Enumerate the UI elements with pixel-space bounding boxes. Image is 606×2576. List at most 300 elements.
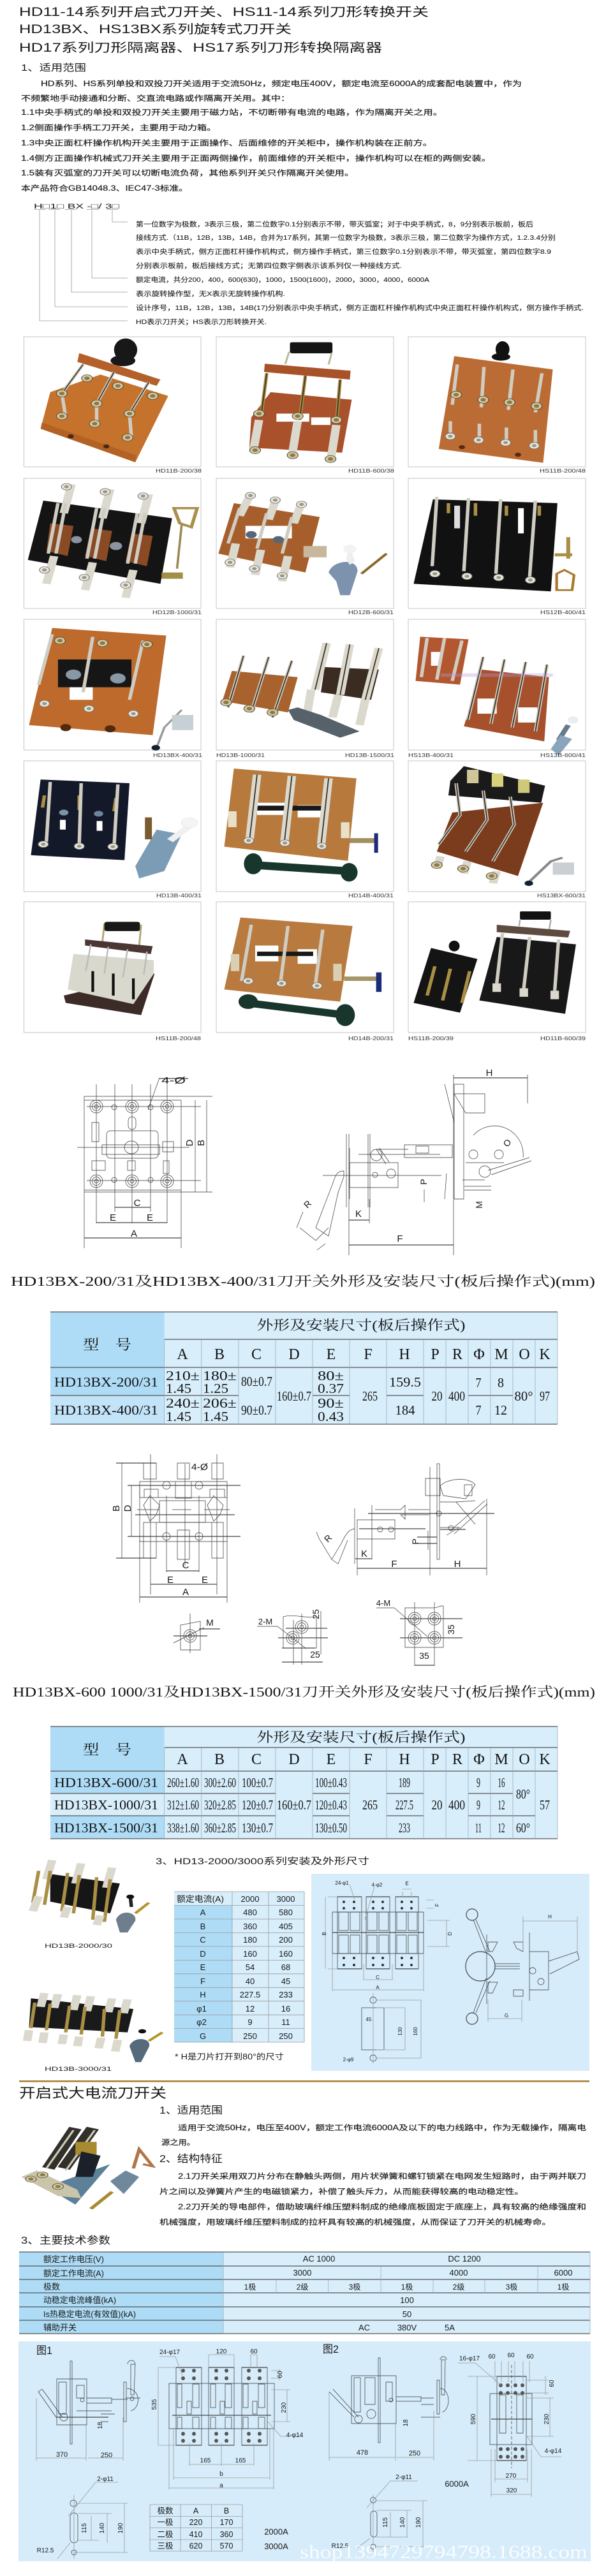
drawing: HD13BX-200/400 front view: A <box>131 1228 137 1239</box>
drawing: 2-M terminal: 25 <box>311 1609 321 1619</box>
drawing: HD13BX-600/1000/1500 side view: F <box>391 1559 397 1570</box>
table: HD13BX-200/400 dimensions: 97 <box>540 1388 550 1404</box>
table: HD13BX-200/400 dimensions: 159.5 <box>389 1374 421 1390</box>
title: HD17系列刀形隔离器、HS17系列刀形转换隔离器 <box>19 41 382 55</box>
table: HD13BX-200/400 dimensions: 90±0.7 <box>241 1402 272 1418</box>
model code diagram: 表示旋转操作型，无X表示无旋转操作机构. <box>136 290 285 298</box>
drawing: HD13 2000/3000 mounting slot: 130 <box>397 2027 403 2036</box>
table: HD13BX-600/1000/1500 dimensions <box>50 1726 558 1839</box>
photo: HS13BX-600/31 <box>431 766 574 886</box>
drawing: HD13BX-200/400 side view <box>297 1068 531 1255</box>
panel: HD13 2000/3000 drawing background <box>311 1874 589 2071</box>
title <box>19 5 429 55</box>
table: HD13BX-200/400 dimensions: C <box>251 1346 262 1363</box>
photo: HD12B-600/31 <box>218 492 387 595</box>
figure 1: rating labels <box>264 2527 288 2551</box>
figure 2: 6000A plan view: 60 <box>488 2353 496 2360</box>
figure 2: 6000A plan view: 270 <box>506 2473 517 2480</box>
figure 1: plan view: 165 <box>235 2457 246 2464</box>
table: HD13BX-200/400 dimensions: 80± <box>318 1368 344 1383</box>
table: HD13BX-600/1000/1500 dimensions: 型 号 <box>83 1742 131 1758</box>
figure 2: 6000A plan view: 60 <box>507 2352 515 2359</box>
photo captions: HD11B-600/39 <box>540 1035 586 1041</box>
table: main technical parameters: DC 1200 <box>448 2254 481 2263</box>
photo: HD13B-400/31 <box>31 779 198 878</box>
table: main technical parameters: AC <box>358 2323 370 2332</box>
drawing: 4-M terminal <box>376 1598 462 1666</box>
table: HD13BX-600/1000/1500 dimensions: R <box>452 1751 462 1768</box>
table: HD13 2000/3000 dimensions: B <box>200 1922 205 1931</box>
text block: scope description: 本产品符合GB14048.3、IEC47-3标准。 <box>21 184 188 193</box>
table: HD13 2000/3000 dimensions: 12 <box>246 2004 255 2013</box>
table: HD13BX-200/400 dimensions: 1.25 <box>203 1381 228 1396</box>
table: HD13BX-600/1000/1500 dimensions: 400 <box>448 1797 465 1813</box>
figure 1: plan view: 24-φ17 <box>159 2349 180 2356</box>
table: HD13 2000/3000 dimensions: 250 <box>243 2031 257 2041</box>
drawing: HD13BX-200/400 front view: C <box>134 1198 141 1209</box>
figure 2: mounting slot: 115 <box>382 2517 389 2528</box>
text block: scope description: 1.5装有灭弧室的刀开关可以切断电流负荷，其他系列开关只作隔离开关使用。 <box>21 168 354 177</box>
table: HD13 2000/3000 dimensions: G <box>200 2031 206 2041</box>
drawing: HD13BX-200/400 side view: M <box>474 1201 484 1209</box>
photo: high current knife switch <box>21 2128 152 2209</box>
model code diagram <box>34 203 584 326</box>
table: HD13BX-200/400 dimensions: 210± <box>166 1368 200 1383</box>
drawing: HD13 2000/3000 plan view: B <box>321 1932 327 1936</box>
drawing: 4-M terminal: 35 <box>419 1651 429 1661</box>
drawing: HD13 2000/3000 plan view: A <box>376 1985 380 1991</box>
table: HD13 2000/3000 dimensions: 额定电流(A) <box>177 1894 224 1904</box>
table: HD13BX-600/1000/1500 dimensions: 12 <box>498 1797 505 1813</box>
table: HD13 2000/3000 dimensions: F <box>200 1976 205 1986</box>
drawing: HD13BX-200/400 side view: F <box>397 1233 403 1244</box>
figure 1: plan view <box>151 2348 304 2489</box>
figure 1: mounting slot <box>37 2476 128 2559</box>
table: HD13BX-200/400 dimensions: R <box>452 1346 462 1363</box>
table: HD13BX-600/1000/1500 dimensions: 120±0.43 <box>315 1797 347 1813</box>
figure 1: plan view: 165 <box>200 2457 211 2464</box>
section: scope and structure: 1、适用范围 <box>159 2105 223 2116</box>
drawing: HD13 2000/3000 plan view: C <box>376 1975 380 1980</box>
drawing: HD13BX-600/1000/1500 front view: E <box>167 1575 174 1586</box>
table: HD13 2000/3000 dimensions: 233 <box>279 1990 293 1999</box>
table: HD13BX-600/1000/1500 dimensions: 320±2.85 <box>204 1797 236 1813</box>
model code diagram: 第一位数字为极数，3表示三极，第二位数字0.1分别表示不带，带灭弧室；对于中央手柄式，8，9分别表示板前，板后 <box>136 220 533 228</box>
table: HD13BX-600/1000/1500 dimensions: 360±2.85 <box>204 1820 236 1836</box>
figure 1: poles table: 三极 <box>157 2542 174 2550</box>
table: HD13BX-200/400 dimensions: 7 <box>476 1375 481 1390</box>
table: HD13 2000/3000 dimensions: H <box>200 1990 206 1999</box>
drawing: single M terminal: M <box>206 1617 214 1628</box>
drawing: HD13BX-600/1000/1500 side view: K <box>361 1549 367 1559</box>
photo: HS11B-200/39 and HD11B-600/39 <box>413 911 576 1014</box>
drawing: HD13BX-200/400 side view: K <box>355 1209 362 1219</box>
photo captions: HD11B-200/38 <box>156 467 202 474</box>
figure 2: side view <box>329 2357 448 2461</box>
text block: scope description <box>21 79 522 193</box>
table: HD13BX-600/1000/1500 dimensions: O <box>519 1751 530 1768</box>
table: HD13 2000/3000 dimensions: 360 <box>243 1922 257 1931</box>
figure 2: 6000A plan view: 590 <box>470 2413 477 2424</box>
figure 1: mounting slot: 115 <box>81 2523 88 2533</box>
figure 2: mounting slot <box>332 2474 427 2553</box>
table: HD13BX-600/1000/1500 dimensions: E <box>327 1751 336 1768</box>
figure 1: plan view: 4-φ14 <box>286 2432 304 2439</box>
table: HD13 2000/3000 dimensions <box>174 1892 304 2042</box>
drawing: HD13BX-200/400 side view: O <box>501 1137 514 1149</box>
photo: HS11B-200/48 <box>439 341 553 463</box>
table: HD13BX-200/400 dimensions: HD13BX-200/31 <box>54 1374 158 1390</box>
title: HD13BX、HS13BX系列旋转式刀开关 <box>19 22 292 36</box>
table: HD13 2000/3000 dimensions: 16 <box>281 2004 290 2013</box>
table: HD13BX-600/1000/1500 dimensions: 260±1.60 <box>167 1775 199 1790</box>
photo: HD14B-200/31 <box>224 918 381 1026</box>
drawing: HD13BX-600/1000/1500 front view: 4-Ø <box>191 1462 208 1473</box>
table: main technical parameters: 2级 <box>453 2283 464 2292</box>
table: HD13 2000/3000 dimensions: E <box>200 1962 206 1972</box>
table: HD13BX-200/400 dimensions: D <box>288 1346 300 1363</box>
text block: scope description: 1.3中央正面杠杆操作机构开关主要用于正面操作、后面维修的开关柜中，操作机构装在正前方。 <box>21 138 432 147</box>
photo: HD13B-1000/31 and HD13B-1500/31 <box>221 643 379 738</box>
table: HD13BX-600/1000/1500 dimensions: B <box>214 1751 225 1768</box>
table: HD13BX-200/400 dimensions: 8 <box>498 1375 504 1390</box>
table: HD13 2000/3000 dimensions: 250 <box>279 2031 293 2041</box>
table: HD13 2000/3000 dimensions: 160 <box>279 1949 293 1959</box>
drawing: HD13 2000/3000 mounting slot: 160 <box>413 2027 418 2036</box>
text block: scope description: 1.2侧面操作手柄工刀开关，主要用于动力箱。 <box>21 123 216 132</box>
table: HD13BX-200/400 dimensions: 184 <box>395 1402 415 1418</box>
figure 1: plan view: 120 <box>216 2348 227 2355</box>
figure 2: side view: 250 <box>409 2450 420 2457</box>
table: HD13 2000/3000 dimensions: C <box>200 1935 206 1945</box>
table: HD13BX-200/400 dimensions: 80±0.7 <box>241 1374 272 1389</box>
table: HD13BX-600/1000/1500 dimensions: 16 <box>498 1775 505 1790</box>
photo captions: HD12B-1000/31 <box>152 609 202 615</box>
figure 1: plan view: 60 <box>277 2371 284 2378</box>
table: HD13BX-200/400 dimensions: 80° <box>514 1388 533 1404</box>
table: main technical parameters: 5A <box>445 2323 455 2332</box>
text block: scope description: 1.1中央手柄式的单投和双投刀开关主要用于磁力站，不切断带有电流的电路，作为隔离开关之用。 <box>21 108 443 117</box>
figure 1: poles table: 570 <box>220 2542 233 2550</box>
photo: HD11B-200/38 <box>41 339 168 462</box>
table: HD13BX-200/400 dimensions: 206± <box>203 1395 237 1411</box>
figure 2: 6000A plan view: 4-φ14 <box>545 2448 562 2455</box>
table: HD13BX-600/1000/1500 dimensions: 100±0.43 <box>315 1775 347 1790</box>
table: HD13BX-600/1000/1500 dimensions: 外形及安装尺寸(板后操作式) <box>256 1730 466 1745</box>
section: scope and structure: 源之用。 <box>161 2138 195 2147</box>
figure 1: poles table: 极数 <box>157 2506 174 2515</box>
photo captions: HD13B-1500/31 <box>345 752 394 758</box>
drawing: HD13BX-600/1000/1500 side view: P <box>410 1538 420 1545</box>
drawing: HD13 2000/3000 plan view: D <box>447 1932 453 1936</box>
section: scope and structure: 2.1刀开关采用双刀片分布在静触头两侧，用片状弹簧和螺钉锁紧在电网发生短路时，由于两并联刀 <box>178 2172 586 2181</box>
table: HD13BX-600/1000/1500 dimensions: 130±0.7 <box>242 1820 273 1836</box>
table: HD13BX-600/1000/1500 dimensions: 189 <box>399 1775 410 1790</box>
photo captions: HD13B-1000/31 <box>216 752 265 758</box>
photo: HD13B-3000/31 <box>27 1993 163 2062</box>
table: main technical parameters: 1极 <box>401 2283 413 2292</box>
figure 2: 6000A plan view: 16-φ17 <box>459 2355 480 2362</box>
photo captions: HD11B-600/38 <box>348 467 394 474</box>
drawing: HD13BX-200/400 front view: D <box>184 1139 195 1146</box>
table: HD13 2000/3000 dimensions: 2000 <box>241 1894 259 1904</box>
figure 1: side view <box>36 2360 140 2461</box>
drawing: HD13 2000/3000 plan view: 24-φ1 <box>335 1880 349 1886</box>
table: HD13BX-600/1000/1500 dimensions: 338±1.60 <box>167 1820 199 1836</box>
figure 1: side view: 250 <box>101 2452 112 2459</box>
section: scope and structure: 2、结构特征 <box>159 2153 223 2165</box>
table: HD13BX-200/400 dimensions: 400 <box>448 1388 465 1404</box>
photo: HD12B-1000/31 <box>28 483 197 598</box>
table: HD13BX-600/1000/1500 dimensions: Φ <box>473 1751 485 1768</box>
table: HD13BX-600/1000/1500 dimensions: 9 <box>477 1797 480 1813</box>
table: HD13 2000/3000 dimensions: D <box>200 1949 206 1959</box>
photo: HD13B-2000/30 <box>33 1860 149 1932</box>
table: HD13BX-600/1000/1500 dimensions: 20 <box>431 1797 443 1813</box>
figure 1: plan view: b <box>219 2471 223 2478</box>
figure 1: plan view: 60 <box>250 2348 258 2355</box>
section: scope and structure: 机械强度，用玻璃纤维压塑料制成的拉杆具有较高的机械强度，从而保证了刀开关的机械寿命。 <box>159 2218 551 2226</box>
table: HD13 2000/3000 dimensions: 45 <box>281 1976 290 1986</box>
model code diagram: HD表示刀开关；HS表示刀形转换开关. <box>136 318 267 326</box>
section: scope and structure: 片之间以及弹簧片产生的电磁锁紧力，补偿了触头斥力，从而能获得较高的电动稳定性。 <box>159 2187 524 2196</box>
figure 2: 6000A plan view: 320 <box>506 2487 517 2494</box>
caption: HD13B-3000/31: HD13B-3000/31 <box>45 2066 112 2072</box>
table: HD13BX-200/400 dimensions: 型 号 <box>83 1337 131 1353</box>
watermark: shop1394729794798.1688.com <box>300 2542 588 2563</box>
table: main technical parameters: Is热稳定电流(有效值)(kA) <box>43 2309 136 2319</box>
figure 1: poles table: 620 <box>189 2542 202 2550</box>
drawing: 2-M terminal <box>257 1609 328 1665</box>
table: HD13BX-200/400 dimensions: 20 <box>431 1388 443 1404</box>
drawing: single M terminal <box>174 1614 220 1653</box>
table: main technical parameters: 1极 <box>558 2283 569 2292</box>
figure 1: mounting slot: 2-φ11 <box>97 2476 114 2483</box>
table: HD13 2000/3000 dimensions: A <box>200 1908 206 1917</box>
drawing: HD13BX-200/400 side view: H <box>486 1068 492 1078</box>
drawing: HD13BX-200/400 front view: 4-Ø <box>161 1075 186 1086</box>
drawing: HD13 2000/3000 side view <box>466 1909 579 2024</box>
figure 2 label: 图2 <box>323 2343 339 2355</box>
table: HD13BX-200/400 dimensions: F <box>364 1346 373 1363</box>
drawing: HD13BX-200/400 front view: E <box>147 1212 153 1223</box>
table: HD13BX-600/1000/1500 dimensions: HD13BX-600/31 <box>54 1775 158 1790</box>
drawing: HD13 2000/3000 plan view: E <box>405 1881 409 1887</box>
figure 1: poles table <box>150 2505 242 2551</box>
drawing: HD13 2000/3000 side view: H <box>548 1914 552 1920</box>
drawing: HD13BX-600/1000/1500 front view: D <box>122 1505 133 1512</box>
table: HD13BX-200/400 dimensions: B <box>214 1346 225 1363</box>
figure 1: rating labels: 2000A <box>264 2527 288 2536</box>
figure 1: poles table: 410 <box>189 2530 202 2539</box>
model code diagram: 接线方式.（11B，12B，13B，14B，合并为17系列，其第一位数字为极数，3表示三极，第二位数字为操作方式，1.2.3.4分别 <box>136 233 556 242</box>
drawing: HD13 2000/3000 plan view <box>321 1880 453 1991</box>
table: HD13BX-600/1000/1500 dimensions: P <box>431 1751 440 1768</box>
table: HD13BX-600/1000/1500 dimensions: HD13BX-1500/31 <box>54 1820 158 1836</box>
drawing: HD13BX-600/1000/1500 front view: B <box>111 1505 122 1512</box>
figure 1: side view: 18 <box>97 2422 104 2429</box>
table: main technical parameters: 3极 <box>506 2283 517 2292</box>
photo captions: HS11B-200/39 <box>408 1035 454 1041</box>
table: HD13BX-600/1000/1500 dimensions: 130±0.50 <box>315 1820 347 1836</box>
table: main technical parameters: 2级 <box>297 2283 308 2292</box>
drawing: HD13BX-600/1000/1500 front view: C <box>182 1560 189 1571</box>
table: HD13BX-600/1000/1500 dimensions: 9 <box>477 1775 480 1790</box>
table: main technical parameters: 额定工作电流(A) <box>43 2269 104 2278</box>
table: HD13BX-200/400 dimensions: A <box>177 1346 188 1363</box>
figure 1: poles table: 170 <box>220 2518 233 2527</box>
figure 1: poles table: A <box>193 2506 199 2515</box>
photo captions: HD13BX-400/31 <box>153 752 202 758</box>
note: H dimension: * H是刀片打开到80°的尺寸 <box>175 2052 284 2061</box>
drawing: HD13 2000/3000 side view: G <box>505 2013 508 2019</box>
drawing: HD13BX-200/400 side view: R <box>302 1198 313 1210</box>
table: HD13 2000/3000 dimensions: 160 <box>243 1949 257 1959</box>
caption: HD13B-2000/30: HD13B-2000/30 <box>45 1943 112 1949</box>
figure 1: plan view: 535 <box>151 2399 158 2410</box>
table: HD13 2000/3000 dimensions: 405 <box>279 1922 293 1931</box>
table: main technical parameters: AC 1000 <box>303 2254 335 2263</box>
panel: product photo grid frames <box>24 337 586 1033</box>
table: HD13BX-600/1000/1500 dimensions: 265 <box>362 1797 378 1813</box>
table: HD13BX-600/1000/1500 dimensions: 300±2.60 <box>204 1775 236 1790</box>
photo captions: HS12B-400/41 <box>540 609 586 615</box>
drawing: HD13BX-200/400 side view: P <box>418 1179 429 1185</box>
divider rule <box>19 2080 589 2082</box>
drawing: HD13 2000/3000 plan view: 4-φ2 <box>372 1882 383 1888</box>
text block: scope description: 1.4侧方正面操作机械式刀开关主要用于正面两侧操作，前面维修的开关柜中，操作机构可以在柜的两侧安装。 <box>21 154 491 163</box>
drawing: HD13 2000/3000 mounting slot: 2-φ9 <box>343 2057 354 2063</box>
table: HD13BX-200/400 dimensions: 外形及安装尺寸(板后操作式) <box>256 1318 466 1333</box>
photo captions: HS13B-600/41 <box>540 752 586 758</box>
drawing: 2-M terminal: 2-M <box>258 1617 272 1626</box>
photo captions <box>152 467 586 1041</box>
drawing: HD13 2000/3000 plan view: F <box>434 1903 440 1906</box>
photo captions: HD13B-400/31 <box>156 892 202 899</box>
table: HD13 2000/3000 dimensions: φ1 <box>196 2004 207 2013</box>
table: HD13BX-600/1000/1500 dimensions: 100±0.7 <box>242 1775 273 1790</box>
drawing: 2-M terminal: 25 <box>310 1649 320 1660</box>
table: HD13BX-600/1000/1500 dimensions: D <box>288 1751 300 1768</box>
model code diagram: 表示中央手柄式，侧方正面杠杆操作机构式，侧方操作手柄式，第三位数字0.1分别表示不带，带灭弧室，第四位数字8.9 <box>136 247 551 256</box>
section: scope and structure: 适用于交流50Hz，电压至400V，额定工作电流6000A及以下的电力线路中，作为无载操作，隔离电 <box>178 2123 587 2132</box>
table: HD13BX-200/400 dimensions: Φ <box>473 1346 485 1363</box>
model code diagram: 分别表示板前，板后接线方式；无第四位数字侧表示该系列仅一种接线方式. <box>136 261 402 270</box>
table: main technical parameters: 3000 <box>293 2268 311 2278</box>
table: main technical parameters: 4000 <box>450 2268 468 2278</box>
heading: HD13-2000/3000 section: 3、HD13-2000/3000系列安装及外形尺寸 <box>156 1856 369 1866</box>
figure 2: mounting slot: 2-φ11 <box>395 2474 412 2481</box>
table: main technical parameters: 极数 <box>43 2282 60 2292</box>
table: HD13BX-200/400 dimensions: 90± <box>318 1395 344 1411</box>
section: scope and structure: 2.2刀开关的导电部件，借助玻璃纤维压塑料制成的绝缘底板固定于底座上，具有较高的绝缘强度和 <box>178 2202 586 2211</box>
table: HD13BX-200/400 dimensions: K <box>539 1346 551 1363</box>
table: main technical parameters: 辅助开关 <box>43 2323 77 2332</box>
table: HD13BX-200/400 dimensions: H <box>399 1346 410 1363</box>
table: HD13BX-200/400 dimensions: HD13BX-400/31 <box>54 1402 158 1418</box>
figure 1: poles table: 220 <box>189 2518 202 2527</box>
model code diagram: H□1□ BX -□/ 3□ <box>34 203 120 210</box>
figure 2: 6000A plan view: 230 <box>543 2413 551 2424</box>
photo captions: HS11B-200/48 <box>156 1035 202 1041</box>
drawing: 4-M terminal: 35 <box>446 1624 456 1635</box>
heading: technical parameters: 3、主要技术参数 <box>21 2235 110 2246</box>
table: HD13BX-200/400 dimensions: 0.43 <box>318 1409 344 1424</box>
table: HD13BX-600/1000/1500 dimensions: C <box>251 1751 262 1768</box>
table: HD13 2000/3000 dimensions: 480 <box>243 1908 257 1917</box>
figure 1: rating labels: 3000A <box>264 2542 288 2551</box>
figure 1: poles table: 二极 <box>157 2530 174 2539</box>
table: main technical parameters: 额定工作电压(V) <box>43 2255 104 2264</box>
table: HD13BX-600/1000/1500 dimensions: 160±0.7 <box>277 1797 311 1813</box>
table: HD13BX-600/1000/1500 dimensions: 60° <box>516 1820 530 1836</box>
table: main technical parameters: 100 <box>400 2295 414 2305</box>
drawing: HD13BX-200/400 front view: E <box>110 1212 116 1223</box>
photo captions: HD14B-200/31 <box>348 1035 394 1041</box>
drawing: HD13BX-600/1000/1500 side view <box>316 1464 494 1575</box>
table: HD13 2000/3000 dimensions: 3000 <box>277 1894 295 1904</box>
figure 1 label: 图1 <box>36 2344 52 2357</box>
drawing: HD13BX-600/1000/1500 front view <box>111 1454 240 1603</box>
table: main technical parameters: 6000 <box>554 2268 572 2278</box>
figure 1: mounting slot: R12.5 <box>37 2547 54 2554</box>
table: HD13 2000/3000 dimensions: 200 <box>279 1935 293 1945</box>
table: HD13 2000/3000 dimensions: 68 <box>281 1962 290 1972</box>
table: HD13BX-600/1000/1500 dimensions: 12 <box>498 1820 505 1836</box>
figure 1: poles table: 360 <box>220 2530 233 2539</box>
table: HD13BX-200/400 dimensions: M <box>494 1346 508 1363</box>
table: HD13BX-200/400 dimensions: 1.45 <box>203 1409 228 1424</box>
figure 1: plan view: 230 <box>281 2402 288 2413</box>
figure 1: side view: 370 <box>56 2451 68 2459</box>
table: HD13BX-200/400 dimensions: 265 <box>362 1388 378 1404</box>
figure 2: 6000A plan view: 60 <box>549 2380 556 2387</box>
figure 1: mounting slot: 190 <box>117 2522 124 2533</box>
caption: dimensions HD13BX-200/400: HD13BX-200/31及HD13BX-400/31刀开关外形及安装尺寸(板后操作式)(mm) <box>11 1274 595 1289</box>
figure 1: mounting slot: 140 <box>99 2522 106 2533</box>
table: HD13BX-600/1000/1500 dimensions: 57 <box>540 1797 550 1813</box>
table: HD13BX-600/1000/1500 dimensions: HD13BX-1000/31 <box>54 1797 158 1813</box>
figure 1: poles table: 一极 <box>157 2518 174 2527</box>
table: HD13BX-200/400 dimensions: 7 <box>476 1402 481 1418</box>
table: HD13BX-600/1000/1500 dimensions: 11 <box>475 1820 482 1836</box>
table: HD13BX-200/400 dimensions: 1.45 <box>166 1381 191 1396</box>
table: main technical parameters: 1极 <box>244 2283 256 2292</box>
drawing: HD13BX-200/400 front view <box>77 1075 212 1248</box>
drawing: HD13BX-600/1000/1500 side view: H <box>454 1559 461 1570</box>
table: HD13BX-200/400 dimensions: E <box>327 1346 336 1363</box>
photo: HS13B-400/31 and HS13B-600/41 <box>415 637 579 755</box>
panel: figure background <box>18 2341 591 2561</box>
table: main technical parameters <box>19 2252 590 2334</box>
table: HD13BX-600/1000/1500 dimensions: 233 <box>399 1820 410 1836</box>
table: HD13BX-200/400 dimensions: 12 <box>494 1402 507 1418</box>
figure 2: 6000A plan view: 60 <box>526 2353 534 2360</box>
table: HD13 2000/3000 dimensions: 54 <box>246 1962 255 1972</box>
table: HD13 2000/3000 dimensions: 227.5 <box>240 1990 260 1999</box>
table: HD13BX-600/1000/1500 dimensions: 227.5 <box>395 1797 413 1813</box>
heading: high current knife switch: 开启式大电流刀开关 <box>19 2086 166 2101</box>
table: HD13BX-600/1000/1500 dimensions: 120±0.7 <box>242 1797 273 1813</box>
figure 2: mounting slot: R12.5 <box>332 2543 349 2550</box>
photo captions: HS11B-200/48 <box>540 467 586 474</box>
table: HD13 2000/3000 dimensions: 11 <box>281 2017 290 2027</box>
drawing: HD13 2000/3000 mounting slot <box>343 1993 421 2063</box>
photo captions: HD14B-400/31 <box>348 892 394 899</box>
table: HD13BX-200/400 dimensions: 0.37 <box>318 1381 344 1396</box>
table: HD13BX-600/1000/1500 dimensions: F <box>364 1751 373 1768</box>
table: HD13BX-200/400 dimensions: 240± <box>166 1395 200 1411</box>
